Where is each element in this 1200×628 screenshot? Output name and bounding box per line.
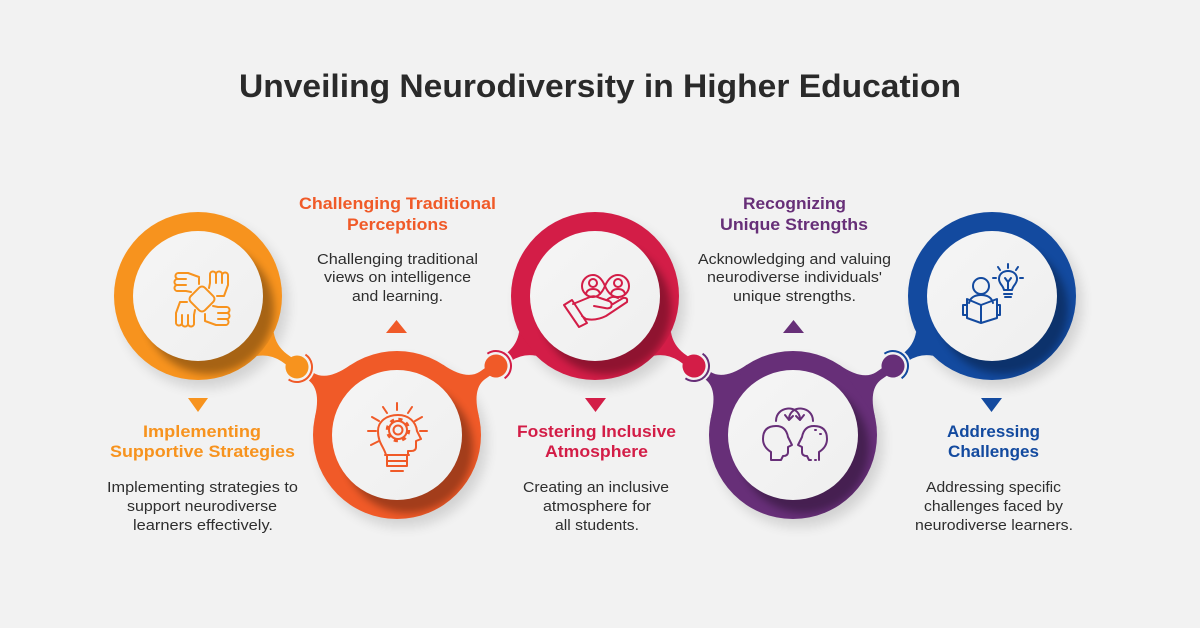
text block: Fostering Inclusive Atmosphere: all students. <box>555 518 639 534</box>
step 1 ring: orange <box>114 212 306 388</box>
text block: Implementing Supportive Strategies: learners effectively. <box>133 518 273 534</box>
text block: Challenging Traditional Perceptions: views on intelligence <box>324 270 471 286</box>
icon: reader with lightbulb <box>963 264 1023 323</box>
text block: Addressing Challenges: neurodiverse learners. <box>915 518 1073 534</box>
pointer: crimson <box>585 398 606 412</box>
text block: Challenging Traditional Perceptions: Challenging Traditional <box>299 195 496 213</box>
icon: lightbulb head with gear <box>368 403 427 471</box>
text block: Addressing Challenges: challenges faced by <box>924 499 1064 515</box>
step 5 ring: blue <box>884 212 1082 388</box>
text block: Fostering Inclusive Atmosphere: Atmosphere <box>545 443 648 461</box>
text block: Fostering Inclusive Atmosphere <box>517 423 676 534</box>
text block: Implementing Supportive Strategies <box>107 423 298 534</box>
step 3 ring: crimson <box>508 212 688 392</box>
icon: four joined hands <box>174 271 230 327</box>
step 2 ring: red-orange <box>308 351 490 530</box>
text block: Addressing Challenges: Addressing specific <box>926 480 1061 496</box>
pointer: red-orange <box>386 320 407 333</box>
text block: Addressing Challenges: Challenges <box>948 443 1039 461</box>
text block: Addressing Challenges: Addressing <box>947 423 1040 441</box>
pointer: purple <box>783 320 804 333</box>
connector node 3 <box>674 345 719 391</box>
title: Unveiling Neurodiversity in Higher Education <box>239 68 961 104</box>
connector node 4 <box>873 341 918 387</box>
pointer: orange <box>188 398 208 412</box>
connector node 2 <box>476 341 521 387</box>
text block: Recognizing Unique Strengths: Recognizing <box>743 195 846 213</box>
text block: Implementing Supportive Strategies: Implementing strategies to <box>107 480 298 496</box>
text block: Challenging Traditional Perceptions: Perceptions <box>347 216 448 234</box>
text block: Challenging Traditional Perceptions: Challenging traditional <box>317 252 478 268</box>
text block: Implementing Supportive Strategies: Supportive Strategies <box>110 443 295 461</box>
icon: two heads exchanging ideas <box>763 409 827 460</box>
text block: Fostering Inclusive Atmosphere: Creating an inclusive <box>523 480 669 496</box>
text block: Recognizing Unique Strengths <box>698 195 891 305</box>
pointer: blue <box>981 398 1002 412</box>
connector node 1 <box>277 346 322 392</box>
text block: Challenging Traditional Perceptions <box>299 195 496 305</box>
text block: Addressing Challenges <box>915 423 1073 534</box>
step 4 ring: purple <box>706 351 887 530</box>
text block: Implementing Supportive Strategies: Implementing <box>143 423 261 441</box>
icon: hand holding infinity people <box>564 275 629 327</box>
text block: Recognizing Unique Strengths: Unique Strengths <box>720 216 868 234</box>
text block: Recognizing Unique Strengths: Acknowledging and valuing <box>698 252 891 268</box>
text block: Challenging Traditional Perceptions: and learning. <box>352 289 443 305</box>
text block: Implementing Supportive Strategies: support neurodiverse <box>127 499 277 515</box>
text block: Recognizing Unique Strengths: neurodiverse individuals' <box>707 270 882 286</box>
text block: Fostering Inclusive Atmosphere: Fostering Inclusive <box>517 423 676 441</box>
text block: Recognizing Unique Strengths: unique strengths. <box>733 289 856 305</box>
text block: Fostering Inclusive Atmosphere: atmosphere for <box>543 499 651 515</box>
